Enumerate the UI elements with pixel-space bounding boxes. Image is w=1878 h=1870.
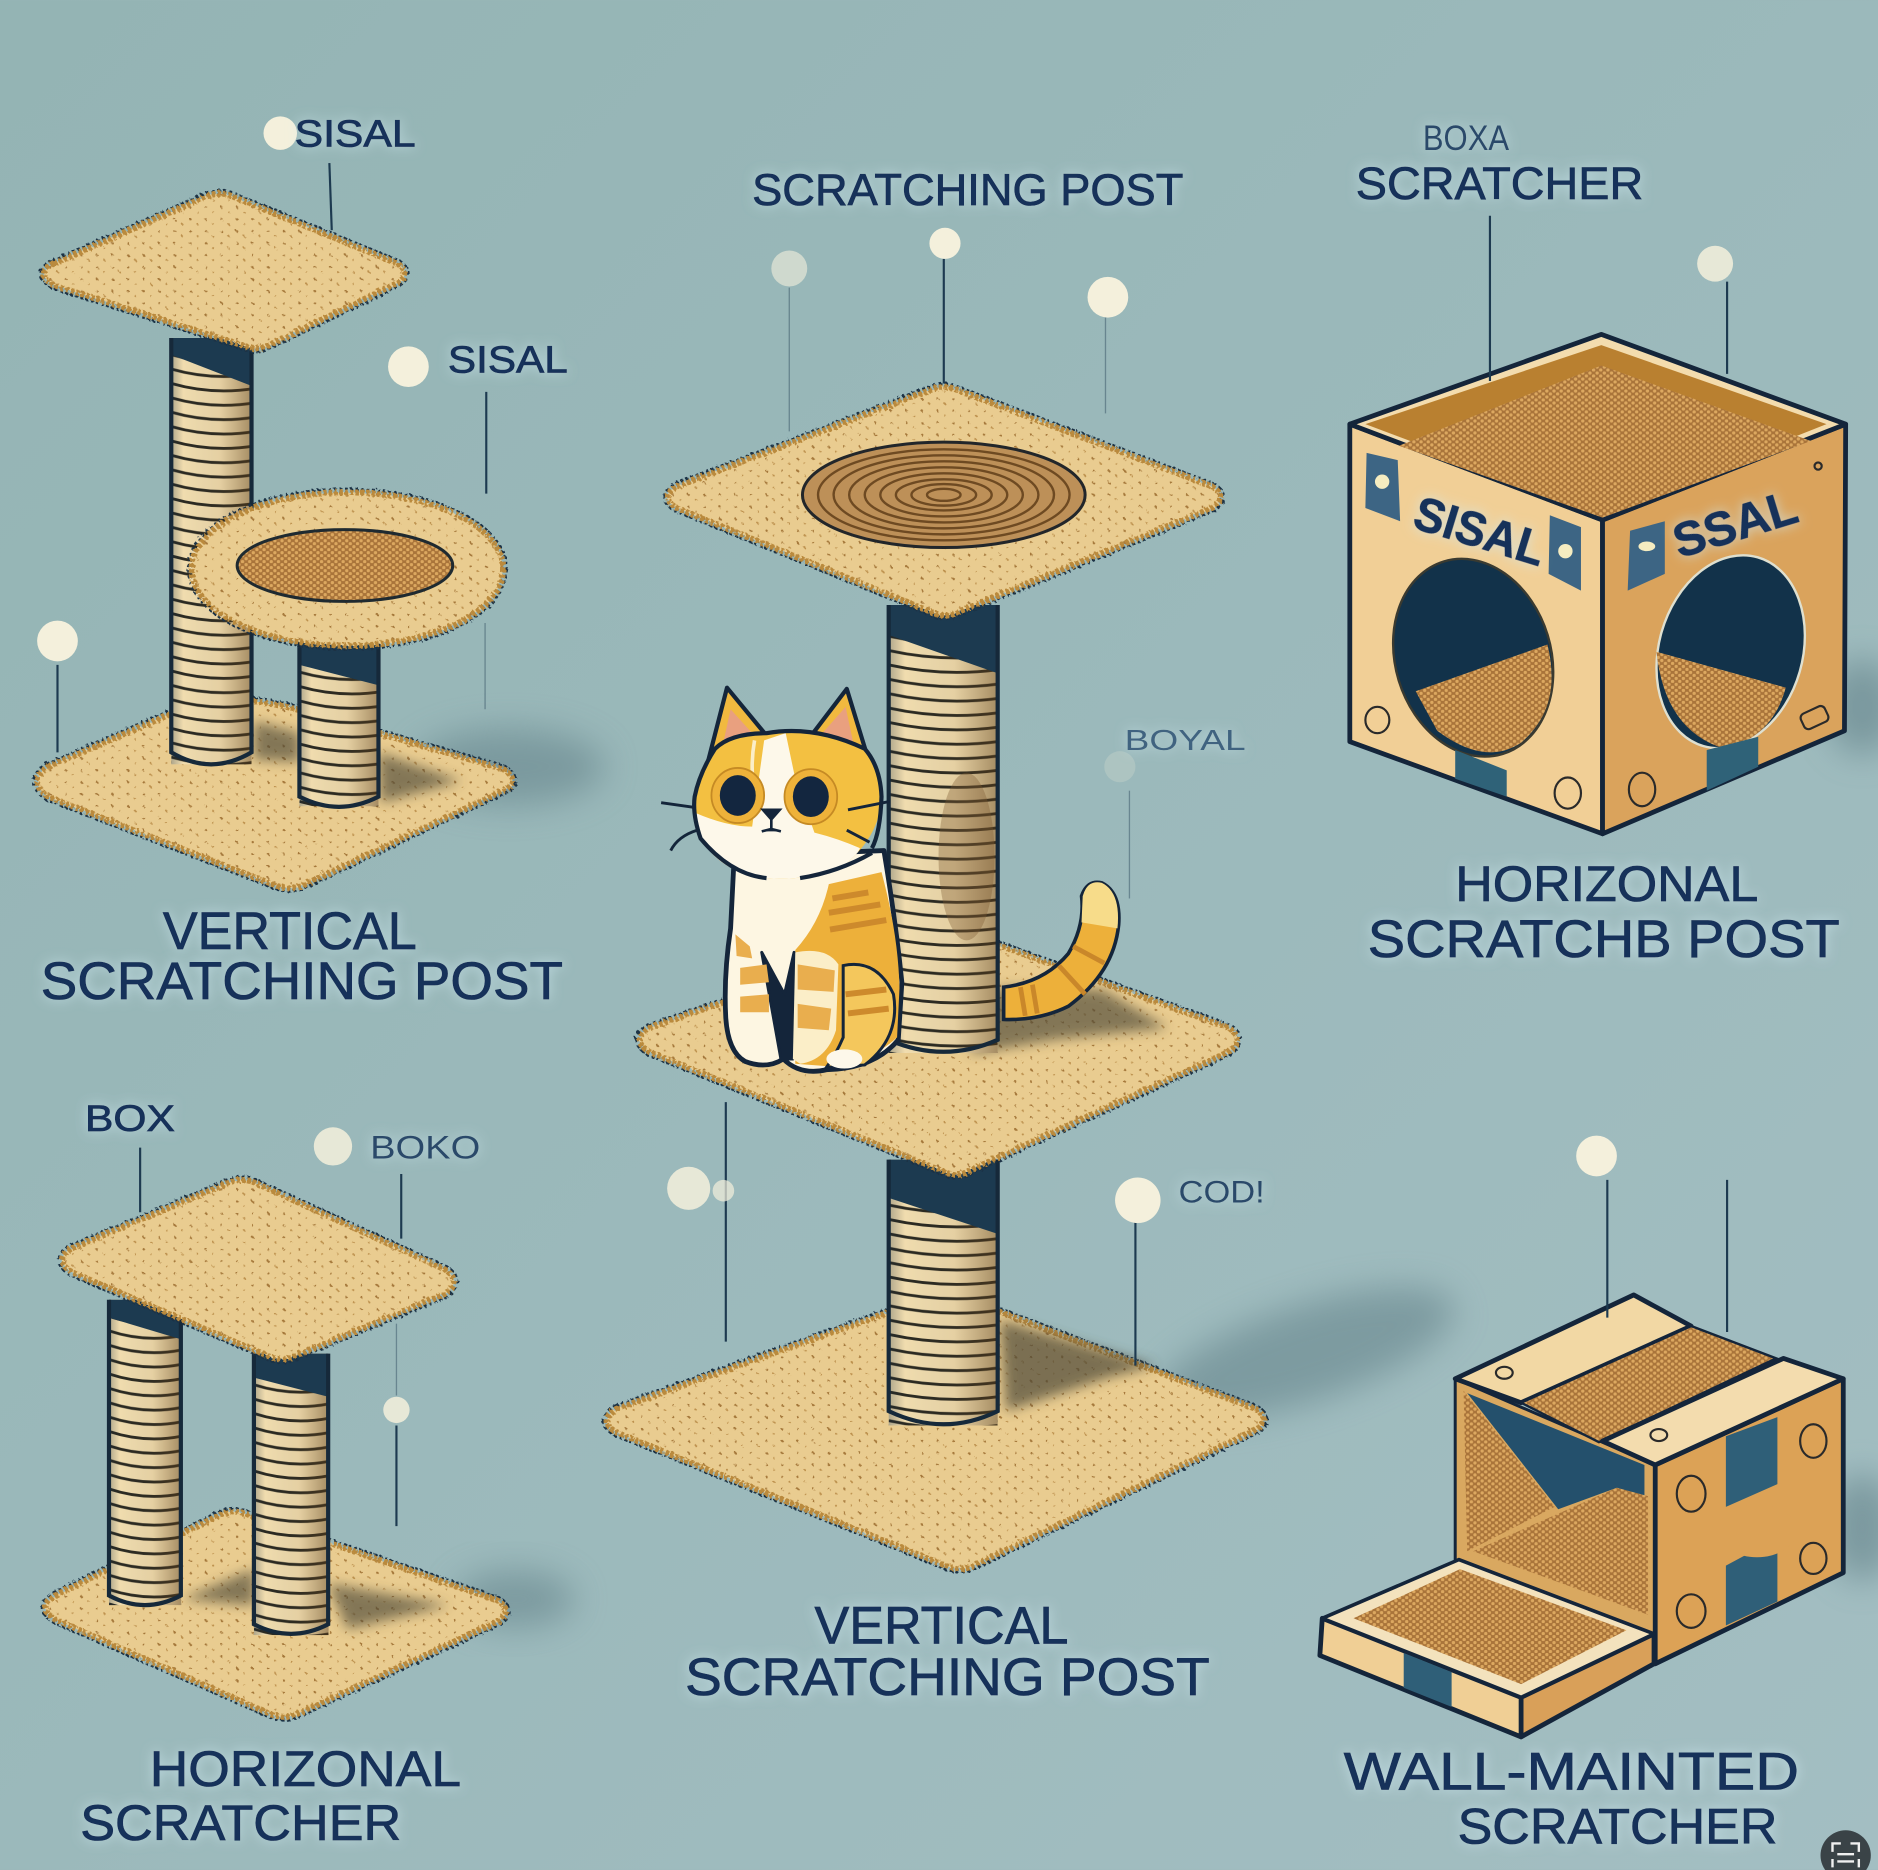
small label: sisal 1: SISAL — [295, 112, 416, 155]
box printed SISAL left: SISAL — [1408, 487, 1551, 577]
base platform — [607, 1294, 1264, 1569]
heading: horizonal scratchb post: SCRATCHB POST — [1368, 910, 1840, 969]
diagram: two post scratcher (lower left) — [46, 1180, 575, 1717]
heading: vertical scratching post centre — [685, 1596, 1210, 1707]
heading: horizonal scratcher: SCRATCHER — [80, 1794, 401, 1851]
heading: vertical scratching post left: SCRATCHING POST — [41, 952, 563, 1011]
top left strip — [1455, 1295, 1691, 1403]
tray navy tape — [1404, 1653, 1452, 1707]
tray sisal — [1353, 1569, 1626, 1684]
front leg — [793, 951, 838, 1064]
haunch — [826, 964, 895, 1067]
top platform — [668, 387, 1220, 616]
small label: scratching post: SCRATCHING POST — [752, 166, 1183, 215]
small label: scratcher: SCRATCHER — [1356, 158, 1643, 209]
white paw — [826, 1049, 862, 1069]
right face — [1603, 424, 1846, 834]
illustration: cat — [661, 688, 1119, 1071]
left hole — [1369, 539, 1577, 777]
middle shadow — [970, 988, 1168, 1054]
box symbols — [1365, 463, 1830, 809]
heading: vertical scratching post centre: SCRATCHING POST — [685, 1648, 1210, 1707]
heading: horizonal scratcher — [80, 1740, 461, 1851]
interior mesh wall — [1464, 1391, 1555, 1551]
floor shadow — [1826, 659, 1878, 755]
side symbols — [1496, 1367, 1826, 1628]
flank stripes — [829, 892, 889, 1013]
tail tip — [1082, 882, 1118, 928]
heading: wall-mainted scratcher: SCRATCHER — [1458, 1797, 1777, 1854]
base shadow — [1000, 1320, 1156, 1411]
base shadows — [182, 1569, 449, 1629]
heading: horizonal scratchb post — [1368, 855, 1840, 969]
side patch — [1718, 1505, 1797, 1557]
heading: horizonal scratchb post: HORIZONAL — [1455, 855, 1758, 912]
eye left — [711, 768, 764, 823]
heading: wall-mainted scratcher — [1344, 1743, 1799, 1854]
front post — [254, 1354, 329, 1635]
tray right face — [1521, 1634, 1654, 1737]
inner wall — [1365, 345, 1826, 513]
bowl sisal inset — [237, 530, 453, 601]
tray left face — [1320, 1618, 1521, 1737]
head — [695, 731, 882, 879]
heading: vertical scratching post left: VERTICAL — [163, 902, 417, 961]
tag holes — [1375, 474, 1655, 558]
interior mesh floor — [1473, 1488, 1648, 1615]
diagram: tall central cat tree — [607, 387, 1468, 1569]
heading: vertical scratching post left — [41, 902, 563, 1011]
top right strip — [1603, 1358, 1843, 1465]
small label: box: BOX — [85, 1097, 175, 1139]
leg stripes — [735, 934, 835, 1030]
nose and mouth — [762, 810, 781, 831]
left face — [1350, 424, 1603, 834]
side navy tape — [1726, 1417, 1777, 1625]
top platform — [44, 194, 405, 348]
tail stripes — [1020, 946, 1104, 1016]
head outline — [694, 731, 882, 878]
top sisal strip — [1521, 1326, 1776, 1442]
base platform — [46, 1512, 506, 1717]
box printed SISAL right: SSAL — [1667, 481, 1804, 569]
diagram: vertical scratching post with bowl (upper left) — [37, 194, 605, 888]
small label: cod: COD! — [1179, 1175, 1265, 1210]
callout pin dots — [37, 116, 1733, 1423]
diagram: open sisal box (upper right) — [1350, 334, 1878, 834]
opening back — [1455, 1379, 1655, 1664]
chest gap — [762, 952, 794, 1059]
tray top — [1322, 1560, 1654, 1697]
tail — [1004, 882, 1119, 1020]
small label: sisal 2: SISAL — [448, 339, 568, 382]
base platform — [37, 695, 513, 888]
small label: boyal: BOYAL — [1125, 725, 1246, 757]
interior navy wall — [1467, 1393, 1644, 1509]
sisal top surface — [1399, 365, 1811, 518]
heading: wall-mainted scratcher: WALL-MAINTED — [1344, 1743, 1799, 1802]
head stripe — [752, 740, 755, 793]
upper post — [889, 605, 998, 1053]
floor shadow — [1143, 1260, 1468, 1447]
small label: boko: BOKO — [370, 1129, 480, 1165]
diagram: cardboard scratcher with tray (lower right) — [1320, 1295, 1878, 1737]
inner ears — [722, 707, 856, 757]
eye right — [784, 769, 837, 824]
top platform — [62, 1180, 454, 1359]
tall sisal post — [171, 338, 252, 764]
top rim — [1350, 334, 1846, 520]
label tags — [1365, 453, 1665, 591]
floor shadow — [1829, 1473, 1878, 1581]
heading: horizonal scratcher: HORIZONAL — [150, 1740, 461, 1797]
whiskers — [661, 801, 890, 851]
back post — [109, 1300, 181, 1605]
white muzzle and blaze — [696, 733, 860, 879]
floor shadow — [455, 1570, 575, 1628]
side face — [1655, 1379, 1843, 1664]
icon: scan button — [1821, 1830, 1871, 1870]
shadow on base — [254, 721, 461, 803]
body — [725, 851, 902, 1071]
small label: boxa: BOXA — [1423, 120, 1510, 158]
navy tape strips — [1455, 737, 1758, 797]
ears — [707, 688, 878, 791]
bowl perch — [192, 492, 503, 646]
orange flank — [795, 872, 899, 1066]
heading: vertical scratching post centre: VERTICAL — [814, 1596, 1068, 1655]
middle platform — [640, 929, 1237, 1175]
floor shadow — [413, 728, 605, 805]
short sisal post — [299, 641, 378, 807]
right hole — [1635, 538, 1827, 766]
lower post — [889, 1160, 998, 1425]
callout pin lines — [57, 163, 1727, 1526]
coiled sisal disc — [802, 442, 1085, 548]
